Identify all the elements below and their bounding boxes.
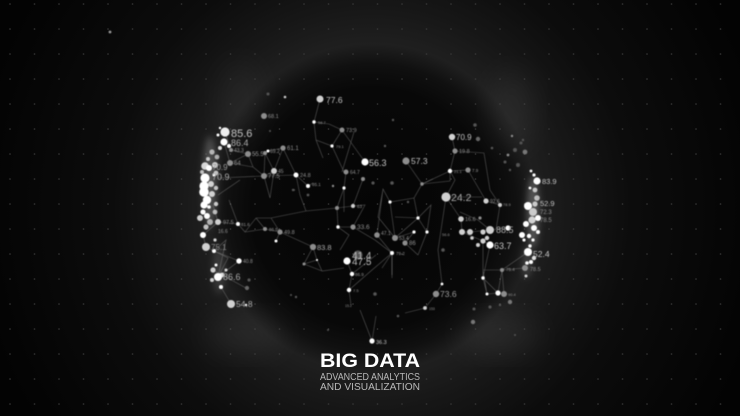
left crescent glow xyxy=(203,136,225,294)
subtitle: advanced analytics and visualization: AND VISUALIZATION xyxy=(320,381,420,393)
small value labels: 72.3 xyxy=(540,210,552,216)
small value labels: 33.6 xyxy=(357,224,370,231)
small value labels: 61.1 xyxy=(287,146,299,152)
small value labels: 49.8 xyxy=(284,230,295,236)
large value labels: 36.3 xyxy=(376,340,387,346)
small value labels: 73.9 xyxy=(346,128,357,134)
small value labels: 40.8 xyxy=(243,259,253,265)
small value labels: 78.9 xyxy=(503,202,512,207)
small value labels: 63 xyxy=(357,204,363,209)
small value labels: 53.4 xyxy=(399,236,409,242)
small value labels: 75.4 xyxy=(506,267,515,272)
small value labels: 21.1 xyxy=(454,169,463,174)
small value labels: 16.6 xyxy=(218,229,228,235)
small value labels: 85.1 xyxy=(312,182,321,187)
small value labels: 64.7 xyxy=(350,170,360,176)
small value labels: 79.1 xyxy=(336,144,345,149)
data nodes: white xyxy=(200,120,541,344)
large value labels: 24.2 xyxy=(451,192,472,204)
large value labels: 70.9 xyxy=(456,133,472,142)
right crescent glow xyxy=(522,176,539,278)
small value labels: 81.6 xyxy=(241,222,250,227)
data nodes: medium grey xyxy=(227,113,528,297)
large value labels: 85.6 xyxy=(231,128,252,140)
large value labels: 56.3 xyxy=(369,158,387,168)
small value labels: 43.3 xyxy=(234,148,244,154)
large value labels: 41.4 xyxy=(352,251,372,262)
small value labels: 68.1 xyxy=(268,114,279,120)
small value labels: 78.5 xyxy=(540,218,552,224)
large value labels: 83.9 xyxy=(542,177,557,186)
left edge node cluster xyxy=(199,127,228,282)
subtitle: advanced analytics and visualization: ADVANCED ANALYTICS xyxy=(320,371,420,383)
small value labels: 19.8 xyxy=(459,149,470,155)
large value labels: 70.9 xyxy=(212,172,230,182)
large value labels: 57.3 xyxy=(411,156,428,166)
small value labels: 92.6 xyxy=(490,199,500,205)
large value labels: 52.4 xyxy=(533,249,550,259)
small value labels: 7.9 xyxy=(472,168,479,173)
large value labels xyxy=(211,95,557,346)
small value labels: 56.6 xyxy=(442,232,451,237)
small value labels: 7.5 xyxy=(353,288,359,293)
large value labels: 77.6 xyxy=(326,95,343,105)
small value labels: 16.6 xyxy=(465,217,476,223)
small value labels: 24.8 xyxy=(300,173,311,179)
small value labels: 79.2 xyxy=(396,251,405,256)
large value labels: 75.1 xyxy=(211,243,227,252)
large value labels: 86.4 xyxy=(231,138,249,148)
data nodes: dim xyxy=(109,31,527,336)
large value labels: 52.9 xyxy=(540,199,555,208)
heading: big data: BIG DATA xyxy=(320,350,420,372)
large value labels: 63.7 xyxy=(494,241,512,251)
small value labels: 47.1 xyxy=(381,231,391,237)
small value labels: 55.5 xyxy=(252,152,264,158)
right edge node cluster xyxy=(522,170,541,278)
small value labels: 86.5 xyxy=(269,227,278,232)
small value labels xyxy=(218,114,552,311)
small value labels: 86.9 xyxy=(355,272,364,277)
small value labels: 97.5 xyxy=(223,220,234,226)
title xyxy=(320,350,420,393)
large value labels: 88.5 xyxy=(496,225,514,235)
large value labels: 83.8 xyxy=(317,243,332,252)
large value labels: 86.6 xyxy=(223,272,241,282)
small value labels: 77.5 xyxy=(268,174,280,180)
data nodes: bright xyxy=(197,96,502,310)
small value labels: 153 xyxy=(429,307,435,311)
large value labels: 73.6 xyxy=(440,289,457,299)
small value labels: 15.2 xyxy=(345,304,352,308)
small value labels: 69.2 xyxy=(270,149,280,155)
small value labels: 64 xyxy=(234,161,241,167)
large value labels: 47.5 xyxy=(352,257,372,268)
small value labels: 86 xyxy=(409,241,416,247)
small value labels: 90.4 xyxy=(508,292,517,297)
small value labels: 58.7 xyxy=(318,120,327,125)
network connection lines xyxy=(203,99,528,341)
glow patches around sphere xyxy=(205,60,540,355)
large value labels: 70.9 xyxy=(212,163,228,172)
small value labels: 45 xyxy=(278,169,284,175)
small value labels: 78.5 xyxy=(530,267,541,273)
large value labels: 54.8 xyxy=(236,299,253,309)
